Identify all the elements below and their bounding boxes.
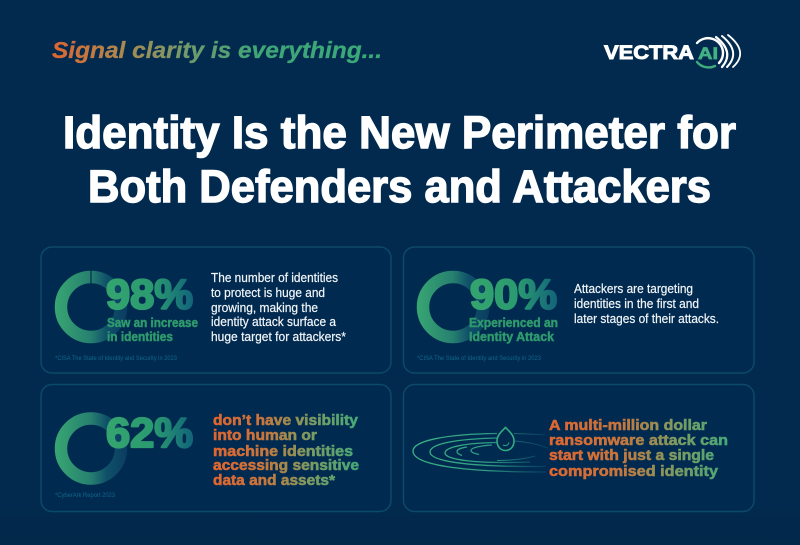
description: identity attack surface a xyxy=(211,314,337,329)
statement xyxy=(549,417,728,480)
logo: Vectra AI xyxy=(604,35,740,67)
statement: start with just a single xyxy=(549,447,714,464)
stat 98%: 98% xyxy=(106,270,193,318)
stat 90%: 90% xyxy=(470,270,557,318)
stat caption xyxy=(107,316,198,344)
description: Attackers are targeting xyxy=(574,281,693,296)
stat caption: Identity Attack xyxy=(469,330,554,344)
statement: ransomware attack can xyxy=(549,432,728,449)
card frame xyxy=(404,247,754,373)
card frame xyxy=(41,247,391,373)
panel: ransomware xyxy=(404,384,754,512)
statement: data and assets* xyxy=(213,472,335,489)
panel: 98% identities xyxy=(41,247,391,373)
card frame xyxy=(404,384,754,512)
logo badge xyxy=(697,35,740,67)
stat caption: Experienced an xyxy=(469,316,558,330)
description: growing, making the xyxy=(211,300,318,315)
card frame xyxy=(41,384,391,512)
donut chart 90% xyxy=(423,277,483,337)
stat caption: Saw an increase xyxy=(107,316,198,330)
description xyxy=(574,281,719,326)
description: later stages of their attacks. xyxy=(574,311,719,326)
statement xyxy=(213,412,359,489)
description: identities in the first and xyxy=(574,296,699,311)
statement: accessing sensitive xyxy=(213,457,359,474)
statement: compromised identity xyxy=(549,463,719,480)
footnote: *CyberArk Report 2023 xyxy=(55,493,116,499)
title line 1: Identity Is the New Perimeter for xyxy=(63,107,736,158)
statement: A multi-million dollar xyxy=(549,417,707,434)
footnote: *CISA The State of Identity and Security in 2023 xyxy=(417,356,542,362)
statement: machine identities xyxy=(213,443,353,460)
panel: 90% attacks xyxy=(404,247,754,373)
donut chart 98% xyxy=(61,270,121,337)
stat caption xyxy=(469,316,558,344)
logo AI: AI xyxy=(698,44,718,63)
icon: drop xyxy=(497,428,514,450)
stat caption: in identities xyxy=(107,330,173,344)
title line 2: Both Defenders and Attackers xyxy=(88,161,711,212)
description: to protect is huge and xyxy=(211,285,325,300)
icon: water drop ripples xyxy=(413,428,548,472)
logo wordmark: VECTRA xyxy=(604,43,694,64)
tagline: Signal clarity is everything... xyxy=(52,37,382,63)
statement: into human or xyxy=(213,427,317,444)
stat 62%: 62% xyxy=(106,409,193,456)
footnote: *CISA The State of Identity and Security in 2023 xyxy=(55,356,178,362)
description xyxy=(211,270,346,344)
description: huge target for attackers* xyxy=(211,329,346,344)
title xyxy=(63,107,736,212)
statement: don’t have visibility xyxy=(213,412,359,429)
donut chart 62% xyxy=(61,418,121,478)
panel: 62% visibility xyxy=(41,384,391,512)
description: The number of identities xyxy=(211,270,338,285)
